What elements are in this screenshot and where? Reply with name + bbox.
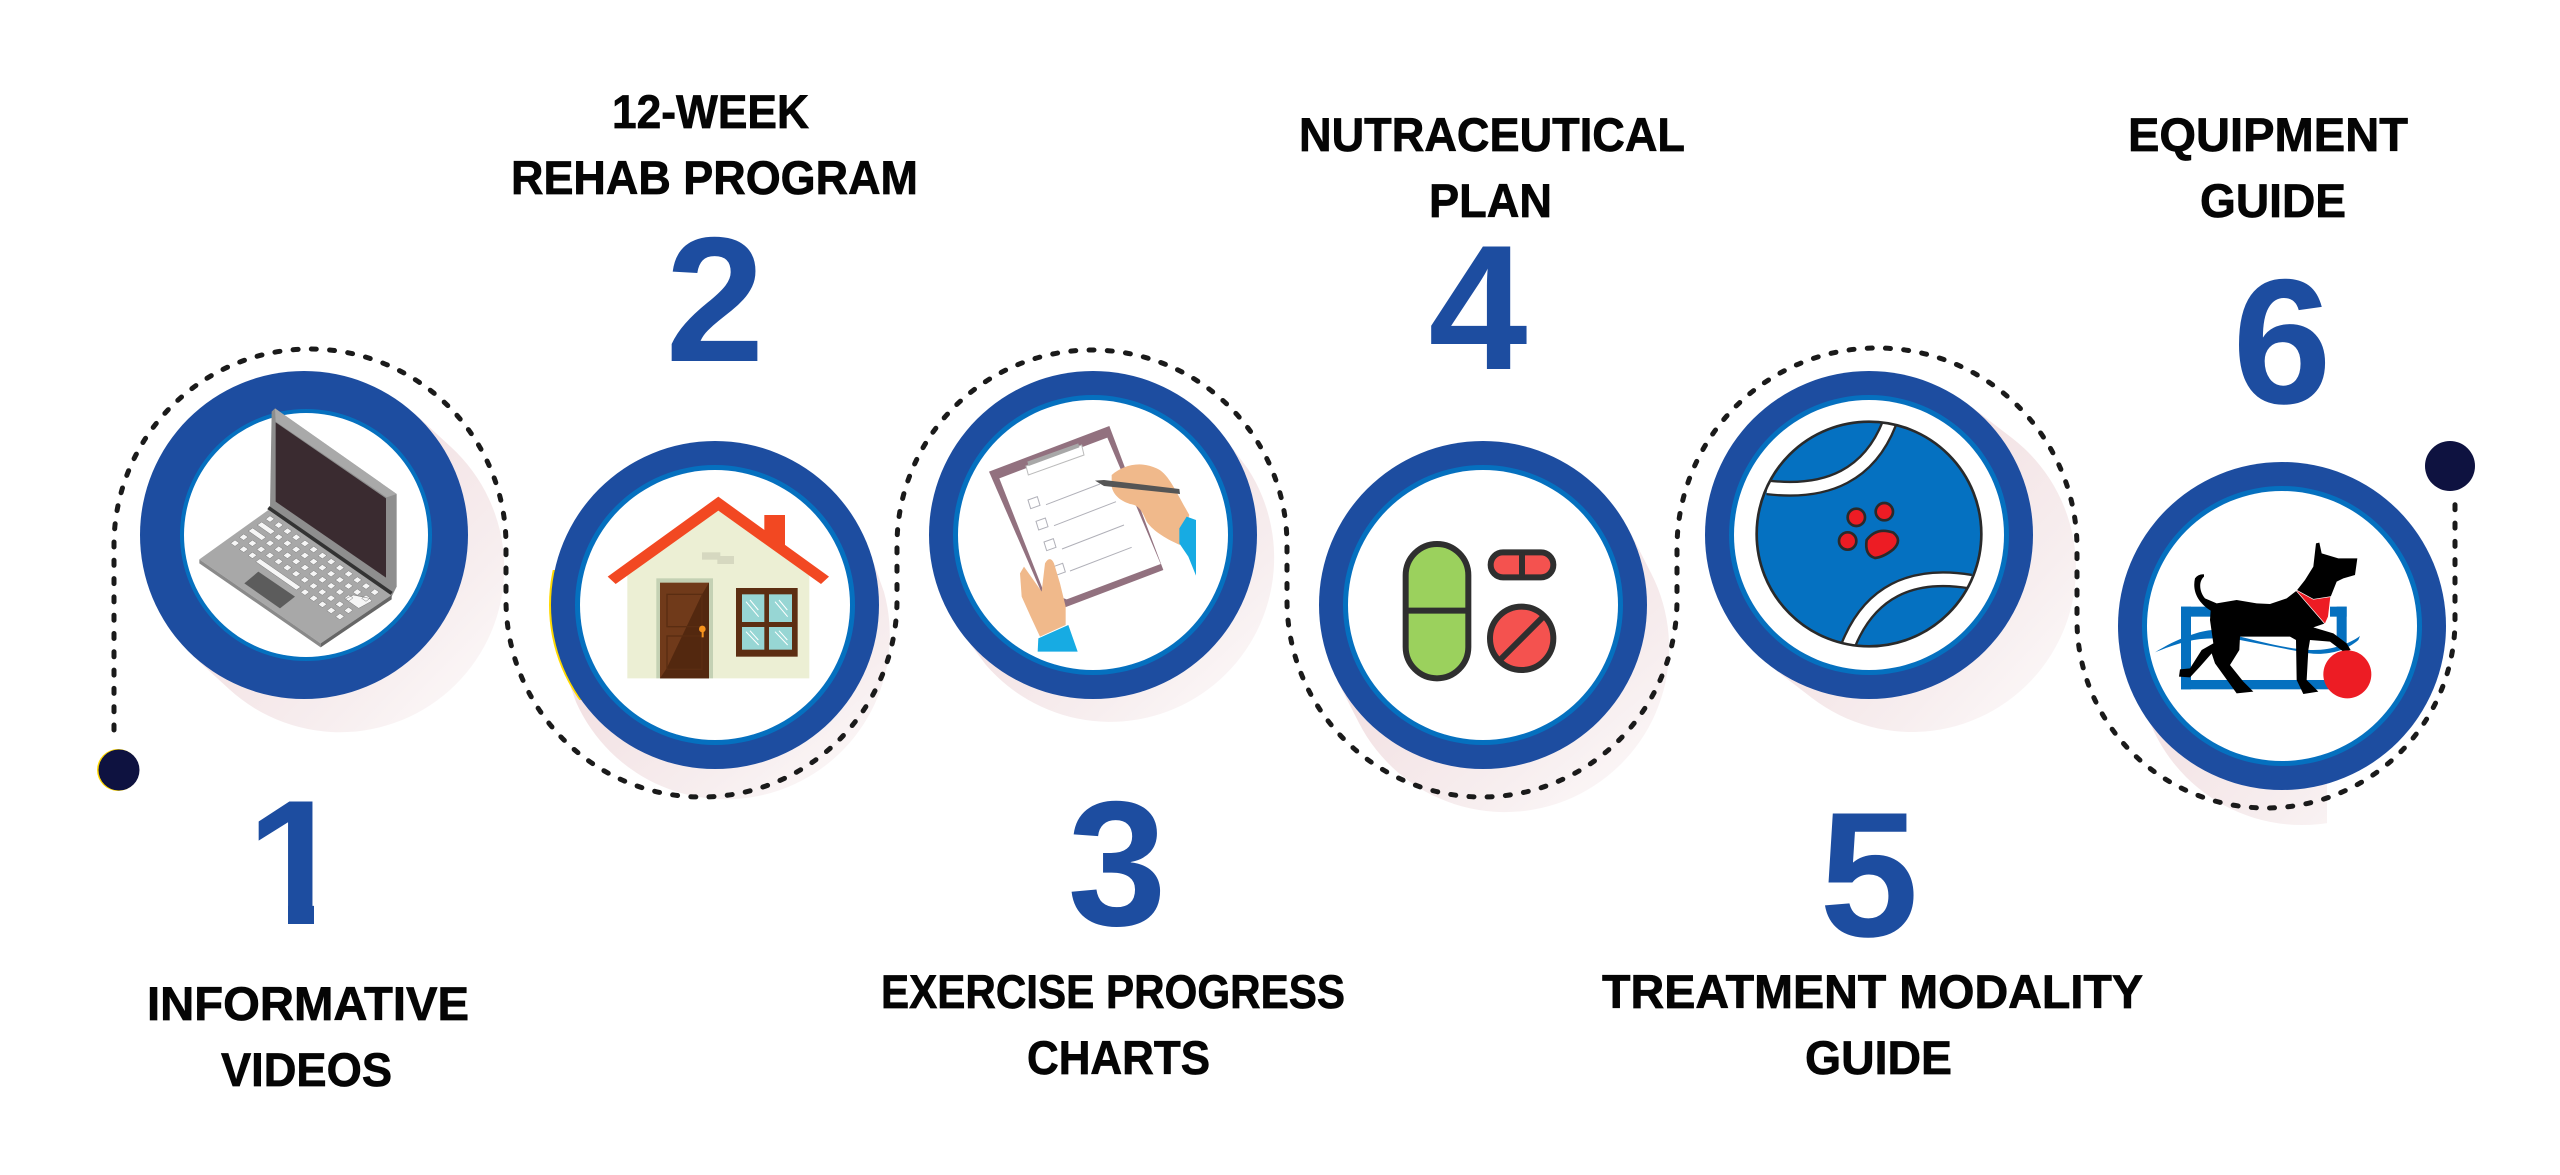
circle shadow 5 — [1769, 405, 2076, 732]
circle shadow 4 — [1337, 530, 1669, 812]
step 5: treatment modality guide — [1602, 371, 2143, 1084]
number 2: 2 — [666, 200, 764, 399]
infographic canvas — [97, 94, 2475, 1087]
ring 2 — [551, 441, 879, 769]
label: equipment guide: GUIDE — [2200, 174, 2346, 227]
circle shadow 1 — [193, 414, 504, 732]
start dot — [97, 749, 140, 791]
circle shadow 2 — [561, 550, 890, 799]
number 3: 3 — [1068, 764, 1166, 963]
label: treatment modality guide: TREATMENT MODALITY — [1602, 965, 2143, 1018]
label: exercise progress charts — [881, 965, 1345, 1084]
label: 12-week rehab program: REHAB PROGRAM — [511, 151, 918, 204]
label: equipment guide: EQUIPMENT — [2128, 108, 2408, 161]
step 2: 12-week rehab program — [511, 85, 918, 799]
label: equipment guide — [2128, 108, 2408, 227]
label: nutraceutical plan: PLAN — [1429, 174, 1552, 227]
number 6: 6 — [2232, 242, 2332, 441]
ring 6 — [2118, 462, 2446, 790]
label: informative videos — [147, 977, 469, 1096]
step 1: informative videos — [140, 371, 504, 1096]
icon: clipboard and hands — [989, 426, 1196, 652]
ring 4 — [1319, 441, 1647, 769]
ring 5 — [1705, 371, 2033, 699]
label: informative videos: INFORMATIVE — [147, 977, 469, 1030]
label: exercise progress charts: EXERCISE PROGRESS — [881, 965, 1345, 1018]
dashed connector path — [114, 348, 2455, 808]
icon: pills — [1406, 544, 1553, 678]
label: exercise progress charts: CHARTS — [1027, 1031, 1210, 1084]
circle shadow 3 — [962, 437, 1274, 722]
icon: house — [608, 497, 829, 678]
icon: laptop — [199, 408, 397, 647]
circle shadow 6 — [2151, 725, 2327, 825]
step 3: exercise progress charts — [881, 371, 1345, 1084]
yellow crescent accent — [549, 570, 582, 700]
label: treatment modality guide — [1602, 965, 2143, 1084]
end dot — [2425, 441, 2475, 491]
number 5: 5 — [1820, 775, 1918, 974]
label: 12-week rehab program: 12-WEEK — [612, 85, 809, 138]
label: 12-week rehab program — [511, 85, 918, 204]
label: treatment modality guide: GUIDE — [1805, 1031, 1952, 1084]
step 6: equipment guide — [2118, 108, 2466, 825]
icon: tennis ball with paw — [1757, 422, 1981, 646]
label: nutraceutical plan: NUTRACEUTICAL — [1299, 108, 1685, 161]
label: nutraceutical plan — [1299, 108, 1685, 227]
icon: dog with ball — [2155, 543, 2371, 698]
number 4: 4 — [1428, 208, 1528, 407]
step 4: nutraceutical plan — [1299, 108, 1685, 812]
ring 1 — [140, 371, 468, 699]
ring 3 — [929, 371, 1257, 699]
label: informative videos: VIDEOS — [221, 1043, 392, 1096]
number 1: 1 — [246, 763, 346, 962]
